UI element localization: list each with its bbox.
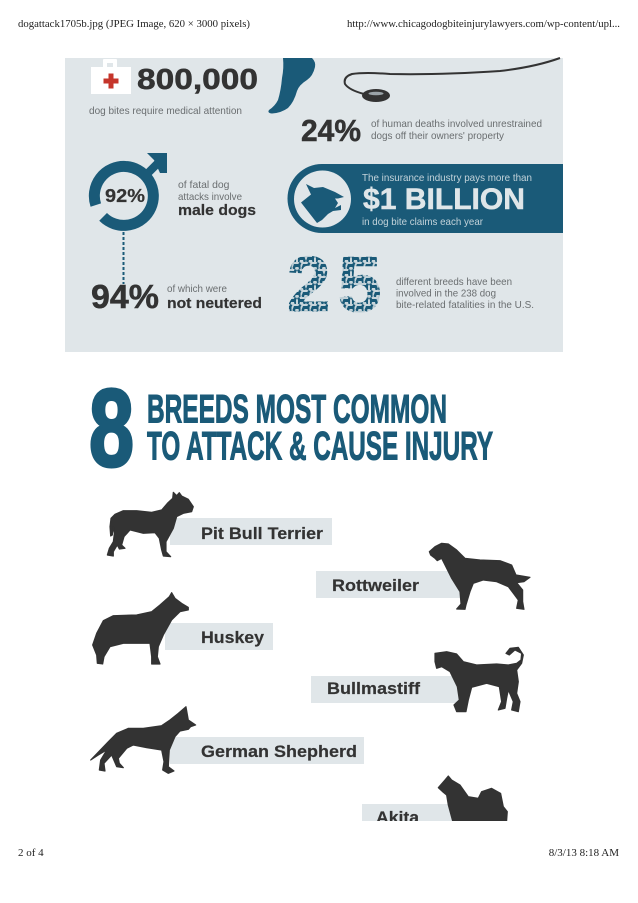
breed: pit bull terrier <box>107 492 332 557</box>
breed: akita <box>355 776 525 831</box>
text: male dogs: male dogs <box>178 202 256 219</box>
breed: german shepherd <box>91 707 364 773</box>
text: breeds involved <box>396 277 534 311</box>
breed: huskey <box>93 593 273 664</box>
icon: husky silhouette <box>93 593 188 664</box>
breed: pit bull terrier: Pit Bull Terrier <box>201 524 323 543</box>
breed: bullmastiff: Bullmastiff <box>327 679 420 698</box>
text: male dogs: of fatal dog <box>178 180 230 191</box>
icon: snarling dog head <box>301 184 344 223</box>
stat: 92%: 92% <box>105 186 145 206</box>
icon: rottweiler silhouette <box>429 543 530 609</box>
icon: medical kit <box>91 59 131 94</box>
text: male dogs <box>178 180 256 219</box>
icon: pit bull silhouette <box>107 492 193 557</box>
graphic: 25 made of dogs: 25 <box>287 240 381 328</box>
text: unrestrained dogs <box>371 119 542 142</box>
text: breeds involved: involved in the 238 dog <box>396 288 496 300</box>
page header: url: http://www.chicagodogbiteinjurylawyers.com/wp-content/upl... <box>347 18 620 30</box>
icon: male symbol ring <box>94 153 167 225</box>
breed: bullmastiff <box>311 647 523 712</box>
text: breeds involved: different breeds have been <box>396 277 512 288</box>
icon: bullmastiff silhouette <box>435 647 523 712</box>
icon: german shepherd silhouette <box>91 707 196 773</box>
text: not neutered: of which were <box>167 284 227 295</box>
breed: akita: Akita <box>376 808 420 827</box>
banner: insurance cost <box>288 164 563 233</box>
heading: 8 breeds <box>89 367 493 490</box>
heading: 8 breeds: 8 <box>89 367 134 490</box>
connector: dashed line <box>122 232 124 284</box>
text: medical attention: dog bites require medical attention <box>89 106 242 117</box>
stat: 94%: 94% <box>91 278 159 315</box>
icon: dog leg <box>268 58 315 114</box>
page footer: timestamp: 8/3/13 8:18 AM <box>549 847 619 859</box>
breed: german shepherd: German Shepherd <box>201 742 357 761</box>
breed: rottweiler <box>316 543 530 609</box>
panel: statistics <box>65 58 563 352</box>
page footer: page number: 2 of 4 <box>18 847 44 859</box>
text: breeds involved: bite-related fatalities in the U.S. <box>396 300 534 311</box>
text: male dogs: attacks involve <box>178 192 242 203</box>
icon: leash and collar <box>345 58 560 102</box>
icon: akita silhouette <box>438 776 507 821</box>
text: unrestrained dogs: of human deaths involved unrestrained <box>371 119 542 130</box>
stat: $1 billion: $1 BILLION <box>363 183 525 216</box>
breed: rottweiler: Rottweiler <box>332 576 419 595</box>
stat: 800,000: 800,000 <box>137 64 258 96</box>
page header: file name: dogattack1705b.jpg (JPEG Image, 620 × 3000 pixels) <box>18 18 250 30</box>
heading: 8 breeds: BREEDS MOST COMMON <box>147 388 447 432</box>
text: not neutered: not neutered <box>167 295 262 312</box>
breed: huskey: Huskey <box>201 628 265 647</box>
text: claims each year: in dog bite claims each year <box>362 216 483 228</box>
text: not neutered <box>167 284 262 312</box>
text: unrestrained dogs: dogs off their owners' property <box>371 131 505 142</box>
text: insurance intro: The insurance industry pays more than <box>362 172 532 184</box>
stat: 24%: 24% <box>301 113 361 148</box>
